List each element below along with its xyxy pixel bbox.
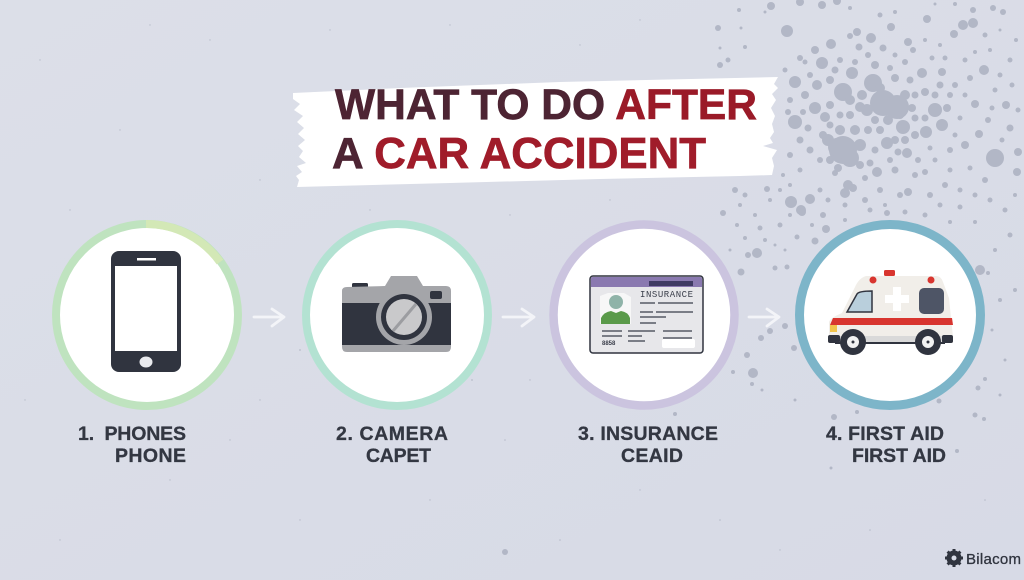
step 2: camera [306,224,488,467]
icon: insurance card [590,276,703,353]
title line 2: A CAR ACCIDENT [332,129,706,178]
title banner [293,77,778,187]
label 4: FIRST AID [852,445,946,467]
label 2: CAPET [366,445,431,467]
label 3: 3. INSURANCE [578,423,718,445]
label 4 [826,423,946,467]
arrow 1 [254,309,284,326]
title line 1: WHAT TO DO AFTER [335,81,757,129]
label 2: 2. CAMERA [336,423,448,445]
icon: insurance card: 8858 [602,341,616,347]
ring 2 [306,224,488,406]
icon: camera [342,276,451,352]
label 3: CEAID [621,445,683,467]
icon: ambulance [828,270,953,355]
logo text: Bilacom [966,551,1021,568]
step 4: first aid [800,224,980,467]
icon: insurance card: INSURANCE [640,290,693,300]
arrow 3 [749,309,779,326]
label 4: 4. FIRST AID [826,423,944,445]
step 3: insurance [554,224,734,467]
label 1: 1. PHONES [78,423,186,445]
label 1: PHONE [115,445,186,467]
ring 4 [800,224,980,406]
ring 3 [554,224,734,406]
arrow 2 [503,309,534,326]
label 2 [336,423,448,467]
label 1 [78,423,186,467]
icon: phone [111,251,181,372]
step 1: phones [56,224,238,467]
label 3 [578,423,718,467]
brush stroke [293,77,778,187]
ring 1 [56,224,238,406]
ink splatter [502,0,1022,555]
logo [945,549,1021,568]
icon: gear [945,549,963,567]
